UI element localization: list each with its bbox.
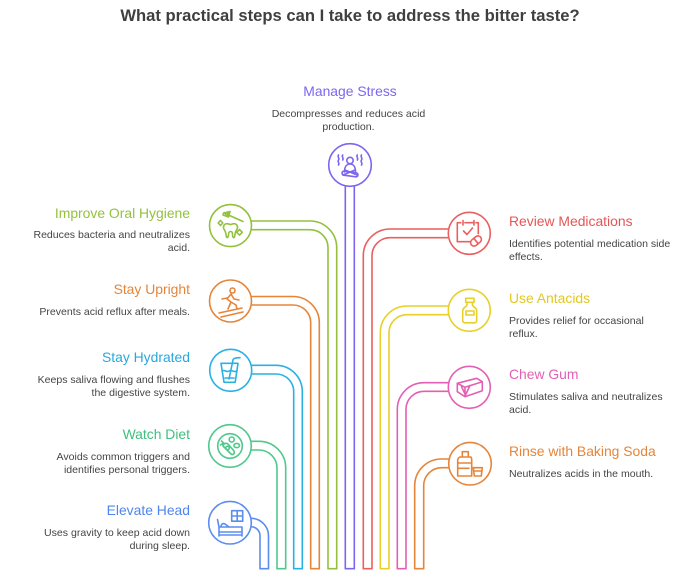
text: manage stress (272, 108, 425, 133)
tube: use antacids (380, 306, 449, 569)
text: chew gum (509, 391, 663, 416)
text: improve oral hygiene: Reduces bacteria and neutralizes (33, 229, 190, 241)
text: review medications: Identifies potential medication side (509, 238, 670, 250)
heading: manage stress: Manage Stress (303, 83, 397, 99)
text: elevate head: Uses gravity to keep acid down (44, 527, 190, 539)
tube: stay hydrated (250, 365, 302, 569)
text: chew gum: Stimulates saliva and neutralizes (509, 391, 663, 403)
icon: watch diet (209, 425, 251, 467)
text: watch diet: identifies personal triggers. (64, 464, 190, 476)
heading: elevate head: Elevate Head (107, 502, 190, 518)
text: manage stress: production. (322, 121, 375, 133)
heading: improve oral hygiene: Improve Oral Hygiene (55, 205, 190, 221)
tube: review medications (363, 229, 449, 569)
tube: stay upright (250, 296, 319, 569)
text: use antacids (509, 315, 644, 340)
tube: improve oral hygiene (250, 221, 337, 569)
tube: manage stress (345, 185, 354, 569)
tube: watch diet (250, 441, 286, 569)
text: review medications: effects. (509, 251, 543, 263)
heading: rinse with baking soda: Rinse with Baking Soda (509, 443, 656, 459)
title: What practical steps can I take to address the bitter taste? (120, 6, 580, 25)
icon: review medications (448, 212, 490, 254)
text: elevate head (44, 527, 190, 552)
heading: watch diet: Watch Diet (123, 426, 190, 442)
text: stay upright: Prevents acid reflux after meals. (39, 306, 190, 318)
text: review medications (509, 238, 670, 263)
text: watch diet: Avoids common triggers and (57, 451, 190, 463)
icon: stay hydrated (210, 349, 252, 391)
icon: use antacids (448, 289, 490, 331)
text: improve oral hygiene (33, 229, 190, 254)
icon: elevate head (209, 501, 251, 544)
text: use antacids: reflux. (509, 328, 538, 340)
heading: review medications: Review Medications (509, 213, 633, 229)
heading: chew gum: Chew Gum (509, 366, 578, 382)
text: stay hydrated: the digestive system. (92, 387, 190, 399)
heading: stay upright: Stay Upright (114, 281, 190, 297)
tube: elevate head (250, 518, 268, 569)
text: stay hydrated (38, 374, 190, 399)
text: rinse with baking soda: Neutralizes acids in the mouth. (509, 468, 653, 480)
icon: manage stress (329, 144, 371, 186)
text: chew gum: acid. (509, 404, 531, 416)
text: use antacids: Provides relief for occasional (509, 315, 644, 327)
heading: stay hydrated: Stay Hydrated (102, 349, 190, 365)
heading: use antacids: Use Antacids (509, 290, 590, 306)
text: manage stress: Decompresses and reduces acid (272, 108, 425, 120)
tube: chew gum (397, 383, 449, 569)
icon: improve oral hygiene (210, 205, 252, 247)
text: watch diet (56, 451, 190, 476)
text: improve oral hygiene: acid. (168, 242, 190, 254)
text: elevate head: during sleep. (130, 540, 190, 552)
icon: stay upright (210, 280, 252, 322)
icon: chew gum (448, 366, 490, 408)
icon: rinse with baking soda (449, 442, 491, 485)
tube: rinse with baking soda (415, 459, 450, 569)
text: stay hydrated: Keeps saliva flowing and flushes (38, 374, 190, 386)
